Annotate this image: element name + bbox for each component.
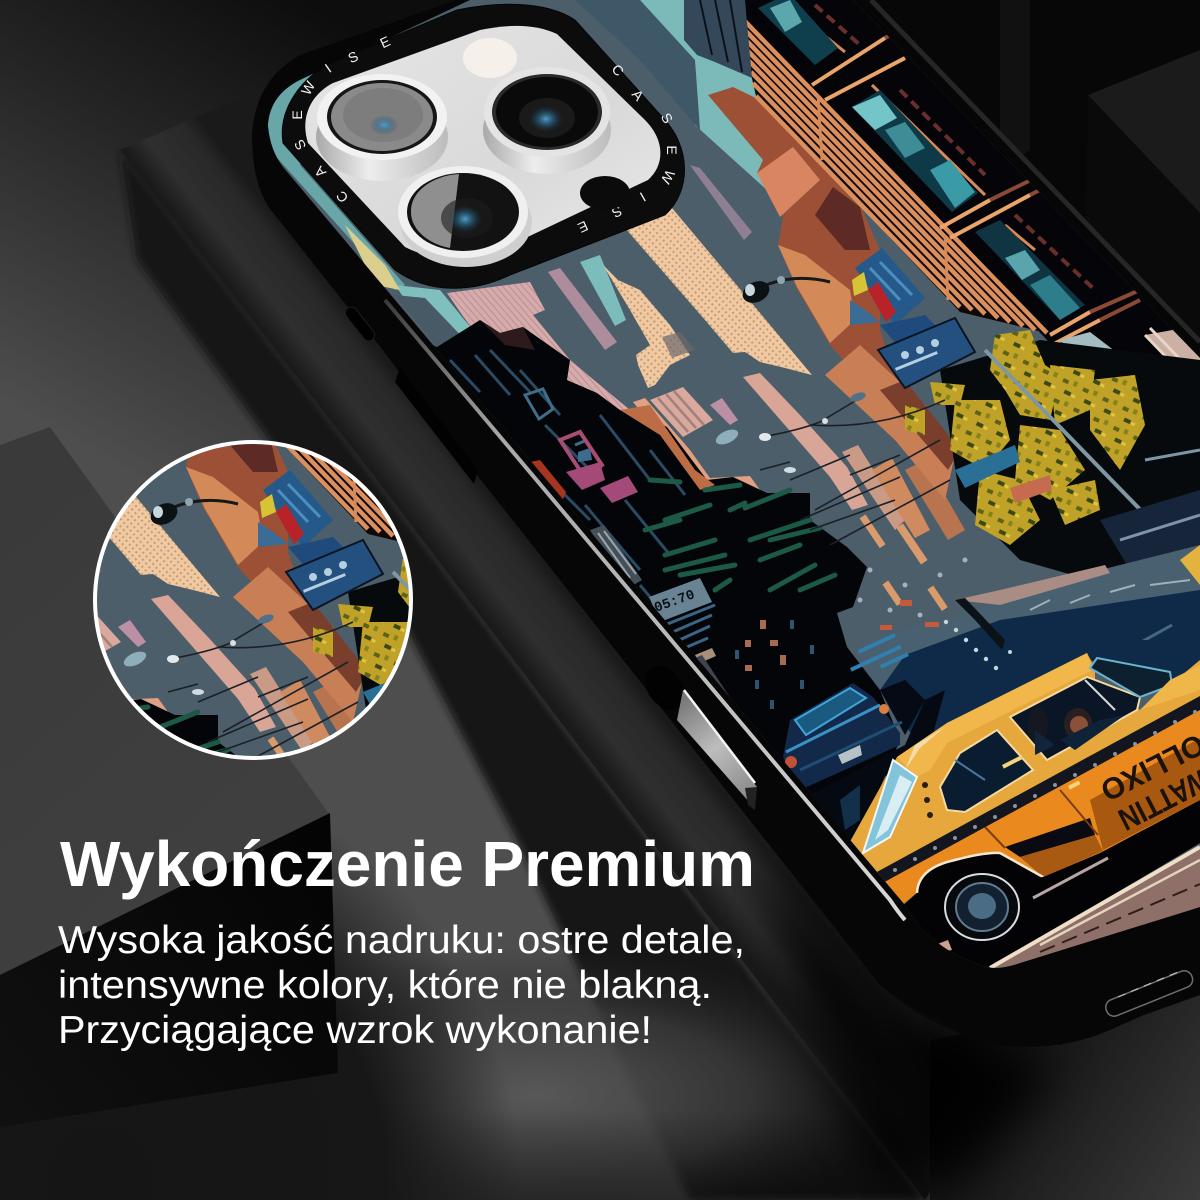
lens: bottom	[398, 166, 532, 267]
lens: top right	[483, 67, 611, 174]
glossy edge highlight	[385, 300, 905, 920]
CASEWISE ring text left: S	[291, 137, 309, 153]
CASEWISE ring text right: E	[664, 145, 680, 155]
CASEWISE ring text left: I	[322, 60, 334, 76]
CASEWISE ring text right: C	[609, 61, 627, 79]
CASEWISE ring text right: S	[658, 110, 676, 126]
charging port	[1103, 968, 1195, 1019]
phone in glossy black case	[252, 0, 1200, 1046]
CASEWISE ring text left: E	[377, 33, 393, 51]
CASEWISE ring text right: A	[629, 86, 648, 104]
body text: intensywne kolory, które nie blakną.	[58, 964, 712, 1007]
camera ring	[282, 4, 685, 288]
side button: upper	[343, 305, 377, 343]
body text	[58, 919, 745, 1052]
CASEWISE ring text right: S	[609, 203, 625, 221]
heading: Wykończenie Premium	[60, 828, 755, 900]
circular zoom detail	[93, 440, 413, 760]
microphone hole	[580, 176, 630, 210]
CASEWISE ring text right: W	[657, 167, 678, 187]
CASEWISE ring text right: I	[637, 189, 649, 205]
lens: top left	[316, 74, 448, 181]
flash	[463, 38, 517, 78]
CASEWISE ring text left: E	[289, 110, 305, 120]
camera glass	[305, 26, 660, 259]
CASEWISE ring text left: A	[310, 163, 329, 181]
side button: silver	[637, 659, 757, 810]
body text: Przyciągające wzrok wykonanie!	[58, 1009, 652, 1052]
screen print	[268, 0, 1200, 968]
CASEWISE ring text left: W	[298, 78, 319, 98]
case body	[252, 0, 1200, 1047]
CASEWISE ring text right	[575, 61, 680, 236]
CASEWISE ring text right: E	[575, 218, 591, 236]
CASEWISE ring text left: C	[333, 188, 351, 206]
CASEWISE ring text left	[289, 33, 393, 206]
CASEWISE ring text left: S	[345, 48, 361, 66]
body text: Wysoka jakość nadruku: ostre detale,	[58, 919, 745, 962]
side button: long	[395, 368, 478, 484]
